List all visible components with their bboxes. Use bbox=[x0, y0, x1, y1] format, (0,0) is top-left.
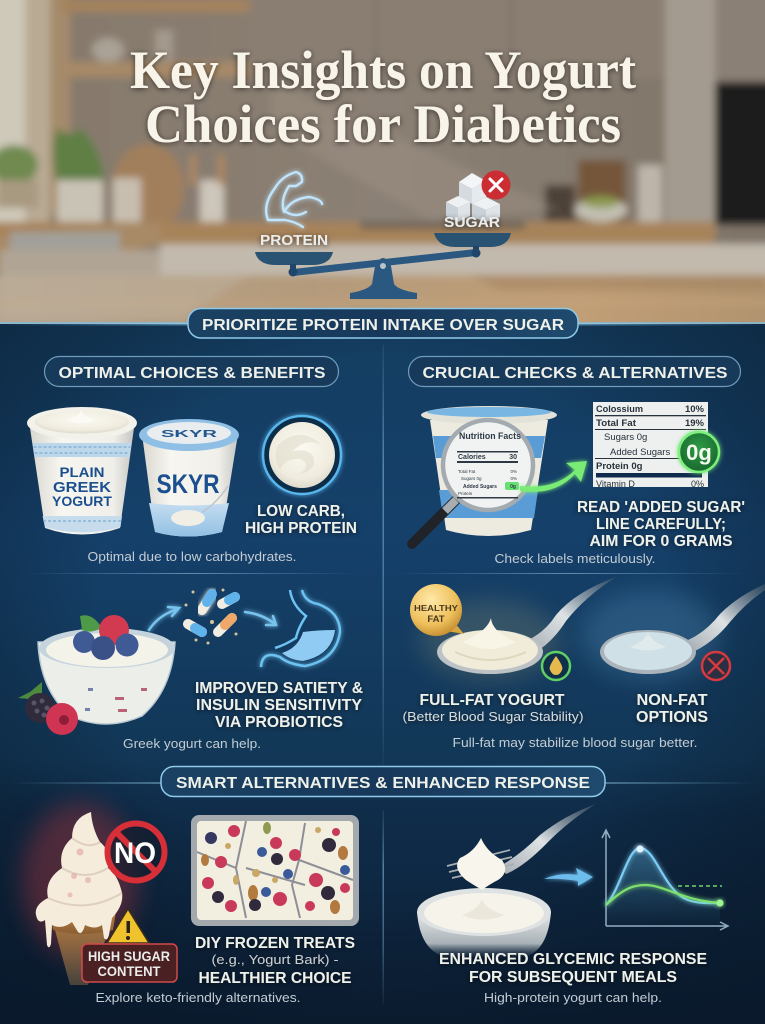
label: read added sugar: AIM FOR 0 GRAMS bbox=[590, 533, 733, 550]
lens: nutrition facts: Added Sugars bbox=[463, 484, 497, 490]
label: protein: PROTEIN bbox=[260, 233, 328, 249]
main title: Choices for Diabetics bbox=[145, 94, 621, 154]
lens: nutrition facts: Nutrition Facts bbox=[459, 431, 521, 442]
lens: nutrition facts: Sugars 0g bbox=[461, 476, 482, 481]
nutrition label detail: Protein 0g bbox=[596, 461, 643, 472]
green arrow to label bbox=[520, 461, 587, 492]
yogurt bowl with berries bbox=[18, 615, 175, 735]
label: low carb high protein: HIGH PROTEIN bbox=[245, 520, 357, 537]
panel: crucial checks and alternatives bbox=[395, 356, 765, 750]
tray of yogurt bark bbox=[191, 815, 359, 926]
badge: high sugar content: HIGH SUGAR bbox=[88, 948, 170, 964]
center column divider bbox=[382, 345, 384, 765]
label: enhanced glycemic response: FOR SUBSEQUENT MEALS bbox=[469, 969, 677, 986]
panel: smart alternatives and enhanced response bbox=[10, 766, 755, 1005]
label: read added sugar bbox=[577, 499, 745, 550]
label: read added sugar: READ 'ADDED SUGAR' bbox=[577, 499, 745, 516]
lens: nutrition facts: 0% bbox=[510, 476, 517, 481]
heading pill: smart alternatives: SMART ALTERNATIVES & ENHANCED RESPONSE bbox=[176, 775, 590, 792]
icon: sugar cubes with red cross bbox=[446, 170, 510, 222]
banner line: prioritize bbox=[0, 323, 765, 326]
heading pill: crucial checks bbox=[408, 356, 740, 386]
label: full-fat yogurt: (Better Blood Sugar Stability) bbox=[402, 709, 584, 724]
yogurt cup with magnifier bbox=[412, 406, 557, 544]
spoon: full-fat yogurt bbox=[420, 577, 616, 680]
label: sugar: SUGAR bbox=[444, 215, 501, 231]
skyr cup: SKYR bbox=[156, 469, 220, 499]
swirl yogurt circle bbox=[263, 416, 341, 494]
nutrition label detail: Total Fat bbox=[596, 418, 637, 429]
heading pill: smart alternatives bbox=[161, 766, 605, 796]
lens: nutrition facts: Protein bbox=[458, 491, 473, 496]
lens: nutrition facts: Calories bbox=[458, 454, 486, 461]
skyr cup bbox=[139, 419, 239, 536]
nutrition label detail: 10% bbox=[685, 404, 705, 415]
main title bbox=[130, 40, 636, 154]
badge: healthy fat: HEALTHY bbox=[414, 603, 458, 613]
plain greek yogurt cup: YOGURT bbox=[52, 493, 112, 509]
nutrition label detail bbox=[593, 402, 719, 489]
icon: stomach bbox=[261, 590, 340, 667]
icon: no sign bbox=[108, 824, 164, 880]
label: enhanced glycemic response bbox=[439, 951, 707, 986]
label: low carb high protein: LOW CARB, bbox=[257, 503, 345, 520]
label: read added sugar: LINE CAREFULLY; bbox=[596, 516, 726, 533]
label: improved satiety: INSULIN SENSITIVITY bbox=[196, 697, 362, 714]
main title: Key Insights on Yogurt bbox=[130, 40, 636, 100]
nutrition label detail: Colossium bbox=[596, 404, 643, 415]
note: explore: Explore keto-friendly alternatives. bbox=[96, 991, 300, 1005]
note: check labels: Check labels meticulously. bbox=[494, 552, 656, 566]
label: diy frozen treats: DIY FROZEN TREATS bbox=[195, 935, 355, 952]
label: improved satiety: VIA PROBIOTICS bbox=[215, 714, 343, 731]
icon: red x bbox=[702, 652, 730, 680]
label: diy frozen treats bbox=[195, 935, 355, 987]
plain greek yogurt cup: PLAIN bbox=[60, 464, 104, 480]
heading pill: optimal choices bbox=[44, 356, 338, 386]
lens: nutrition facts: 0g bbox=[510, 484, 516, 490]
icon: probiotic capsules bbox=[184, 588, 238, 644]
skyr cup: SKYR bbox=[161, 428, 218, 440]
lens: nutrition facts: 0% bbox=[510, 469, 517, 474]
label: diy frozen treats: (e.g., Yogurt Bark) - bbox=[212, 952, 338, 967]
icon: no sign: NO bbox=[114, 837, 156, 870]
spoon: non-fat yogurt bbox=[580, 584, 765, 680]
arrow to stomach bbox=[245, 612, 276, 625]
plain greek yogurt cup: GREEK bbox=[53, 479, 111, 496]
note: high-protein: High-protein yogurt can help. bbox=[484, 991, 662, 1005]
icon: protein muscle arm bbox=[266, 172, 322, 227]
ice cream with warning bbox=[22, 802, 138, 985]
icon: oil drop bbox=[542, 652, 570, 680]
heading pill: prioritize protein: PRIORITIZE PROTEIN INTAKE OVER SUGAR bbox=[202, 317, 564, 334]
nutrition label detail: 0% bbox=[691, 479, 704, 489]
heading pill: prioritize protein bbox=[188, 308, 578, 338]
label: improved satiety: IMPROVED SATIETY & bbox=[195, 680, 363, 697]
nutrition label detail: 0g bbox=[686, 440, 712, 465]
note: greek yogurt: Greek yogurt can help. bbox=[123, 737, 261, 751]
label: non-fat options: NON-FAT bbox=[636, 692, 708, 709]
heading pill: optimal choices: OPTIMAL CHOICES & BENEFITS bbox=[58, 365, 326, 382]
nutrition label detail: Added Sugars bbox=[610, 447, 670, 458]
arrow to probiotics bbox=[149, 607, 179, 630]
label: non-fat options: OPTIONS bbox=[636, 709, 708, 726]
badge: healthy fat bbox=[410, 584, 464, 636]
dark infographic panel background bbox=[0, 324, 765, 1024]
lens: nutrition facts bbox=[457, 431, 521, 498]
icon: warning triangle bbox=[107, 909, 149, 943]
bowl with yogurt and fork bbox=[417, 804, 596, 957]
arrow to glycemic chart bbox=[544, 868, 593, 886]
badge: high sugar content: CONTENT bbox=[98, 963, 161, 979]
label: enhanced glycemic response: ENHANCED GLYCEMIC RESPONSE bbox=[439, 951, 707, 968]
badge: high sugar content bbox=[82, 944, 177, 982]
label: full-fat yogurt bbox=[402, 692, 584, 724]
plain greek yogurt cup bbox=[27, 407, 137, 534]
lens: nutrition facts: Total Fat bbox=[458, 469, 476, 474]
scale body bbox=[255, 233, 511, 299]
header: blurred kitchen background bbox=[0, 0, 765, 330]
lens: nutrition facts: 30 bbox=[509, 454, 517, 461]
balance scale: protein outweighs sugar bbox=[255, 170, 511, 299]
nutrition label detail: Vitamin D bbox=[596, 479, 635, 489]
note: full-fat: Full-fat may stabilize blood sugar better. bbox=[452, 736, 698, 750]
panel: optimal choices and benefits bbox=[18, 356, 363, 751]
label: full-fat yogurt: FULL-FAT YOGURT bbox=[420, 692, 565, 709]
label: diy frozen treats: HEALTHIER CHOICE bbox=[198, 970, 352, 987]
note: optimal: Optimal due to low carbohydrates. bbox=[88, 550, 296, 564]
nutrition label detail: Sugars 0g bbox=[604, 432, 647, 443]
heading pill: crucial checks: CRUCIAL CHECKS & ALTERNATIVES bbox=[422, 365, 728, 382]
badge: healthy fat: FAT bbox=[427, 614, 445, 625]
label: low carb high protein bbox=[245, 503, 357, 537]
label: non-fat options bbox=[636, 692, 708, 726]
nutrition label detail: 19% bbox=[685, 418, 705, 429]
glycemic response chart bbox=[602, 830, 728, 930]
label: improved satiety bbox=[195, 680, 363, 731]
